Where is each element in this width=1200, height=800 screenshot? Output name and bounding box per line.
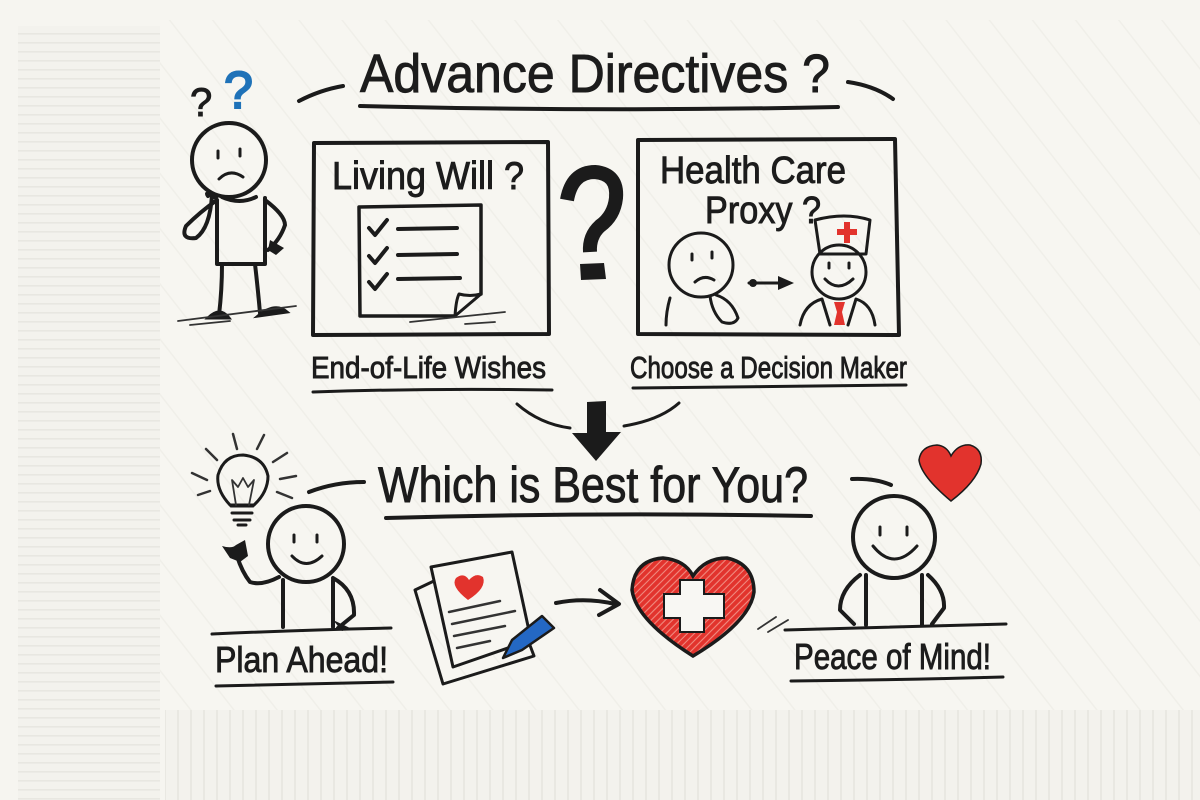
icon: document with pen <box>415 552 554 684</box>
title: Advance Directives ? <box>360 44 830 104</box>
icon: heart with cross <box>632 558 788 656</box>
icon: checklist document <box>359 205 505 324</box>
panel: living will <box>313 142 549 335</box>
arrow: to proxy <box>749 276 794 290</box>
caption: choose a decision maker: Choose a Decision Maker <box>630 350 907 385</box>
arrow: down <box>517 401 679 461</box>
heading: health care proxy: Health Care <box>660 150 846 192</box>
panel: health care proxy <box>638 139 899 335</box>
icon: thinking person <box>666 233 738 325</box>
plan ahead figure <box>212 506 391 634</box>
heading: which is best for you: Which is Best for You? <box>378 457 808 513</box>
peace of mind figure <box>785 496 1006 630</box>
heading: living will: Living Will ? <box>332 155 524 198</box>
icon: question marks: ? <box>224 62 253 120</box>
caption: peace of mind: Peace of Mind! <box>794 636 991 677</box>
icon: large question mark <box>567 172 616 280</box>
icon: doctor <box>800 216 875 325</box>
icon: question marks: ? <box>190 81 212 125</box>
icon: question marks <box>190 62 253 125</box>
caption: plan ahead: Plan Ahead! <box>215 639 388 680</box>
icon: light bulb <box>192 434 296 525</box>
icon: red heart <box>919 445 981 501</box>
arrow: to heart <box>556 590 619 615</box>
thinking stick figure <box>178 123 296 325</box>
caption: end-of-life wishes: End-of-Life Wishes <box>311 350 546 385</box>
panel: health care proxy: Proxy ? <box>705 190 821 232</box>
